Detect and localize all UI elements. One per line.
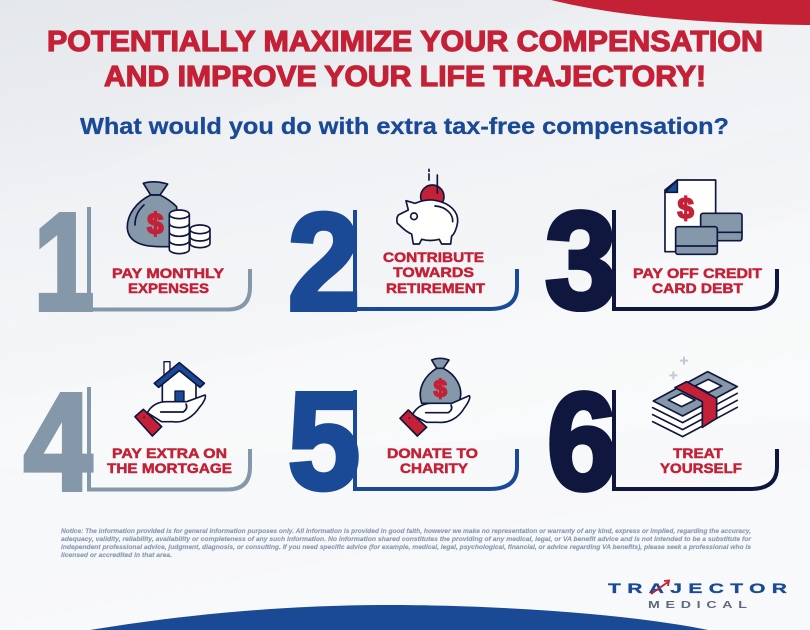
number 1: 1 <box>34 186 94 340</box>
label <box>107 445 232 476</box>
icon: bill and credit cards <box>665 180 742 254</box>
icon: money bag and coins <box>127 182 210 254</box>
panel: treat yourself <box>547 357 777 519</box>
frame 6 <box>614 390 777 489</box>
title <box>47 26 763 93</box>
number 6: 6 <box>547 365 617 519</box>
disclaimer notice: licensed or accredited in that area. <box>61 552 172 559</box>
label: YOURSELF <box>660 460 742 476</box>
frame 5 <box>355 390 517 489</box>
frame 4 <box>89 387 250 490</box>
panel: donate to charity <box>288 358 517 518</box>
label <box>660 445 742 476</box>
panel: contribute towards retirement <box>288 169 517 340</box>
label: TREAT <box>673 445 723 461</box>
label: DONATE TO <box>387 445 478 461</box>
logo: Trajector Medical: TRAJECTOR <box>608 580 787 596</box>
title: AND IMPROVE YOUR LIFE TRAJECTORY! <box>104 61 706 93</box>
icon: bill and credit cards: $ <box>677 193 694 226</box>
number 3: 3 <box>545 184 617 338</box>
label <box>383 249 485 296</box>
frame 1 <box>89 207 250 310</box>
label: TOWARDS <box>393 264 474 280</box>
frame 3 <box>614 210 777 309</box>
label: PAY OFF CREDIT <box>633 265 763 281</box>
icon: piggy bank <box>397 169 458 244</box>
number 5: 5 <box>288 364 360 518</box>
frame 2 <box>355 210 517 309</box>
bottom blue swoosh <box>90 605 708 630</box>
label <box>112 265 225 296</box>
label: THE MORTGAGE <box>107 460 232 476</box>
label: RETIREMENT <box>386 280 485 296</box>
panel: pay extra on the mortgage <box>24 362 250 520</box>
icon: money bag and coins: $ <box>147 208 163 241</box>
disclaimer notice <box>61 528 751 559</box>
logo: Trajector Medical <box>608 580 787 611</box>
panel: pay off credit card debt <box>545 180 777 338</box>
icon: hand holding money bag: $ <box>434 376 447 403</box>
subtitle: What would you do with extra tax-free compensation? <box>80 113 729 139</box>
disclaimer notice: Notice: The information provided is for general information purposes only. All information is provided in good faith, however we make no representation or warranty of any kind, express or implied, regarding the accuracy, <box>61 528 751 535</box>
logo: Trajector Medical: MEDICAL <box>648 599 747 611</box>
label: PAY EXTRA ON <box>112 445 227 461</box>
icon: stack of cash <box>653 357 737 437</box>
label: EXPENSES <box>128 280 209 296</box>
icon: hand holding house <box>135 362 205 436</box>
label: CONTRIBUTE <box>383 249 484 265</box>
label <box>633 265 763 296</box>
disclaimer notice: independent professional advice, judgment, diagnosis, or consulting. If you need specific advice (for example, medical, legal, psychological, financial, or advice regarding VA benefits), please seek a professional who is <box>61 544 751 551</box>
icon: hand holding money bag <box>400 358 470 436</box>
title: POTENTIALLY MAXIMIZE YOUR COMPENSATION <box>47 26 763 58</box>
label <box>387 445 478 476</box>
label: PAY MONTHLY <box>112 265 225 281</box>
number 2: 2 <box>288 186 360 340</box>
panel: pay monthly expenses <box>34 182 250 340</box>
number 4: 4 <box>24 366 92 520</box>
label: CARD DEBT <box>652 280 743 296</box>
top red swoosh <box>551 0 810 25</box>
label: CHARITY <box>400 460 469 476</box>
disclaimer notice: adequacy, validity, reliability, availability or completeness of any such information. No information shared constitutes the providing of any medical, legal, or VA benefit advice and is not intended to be a substitute for <box>61 536 751 543</box>
